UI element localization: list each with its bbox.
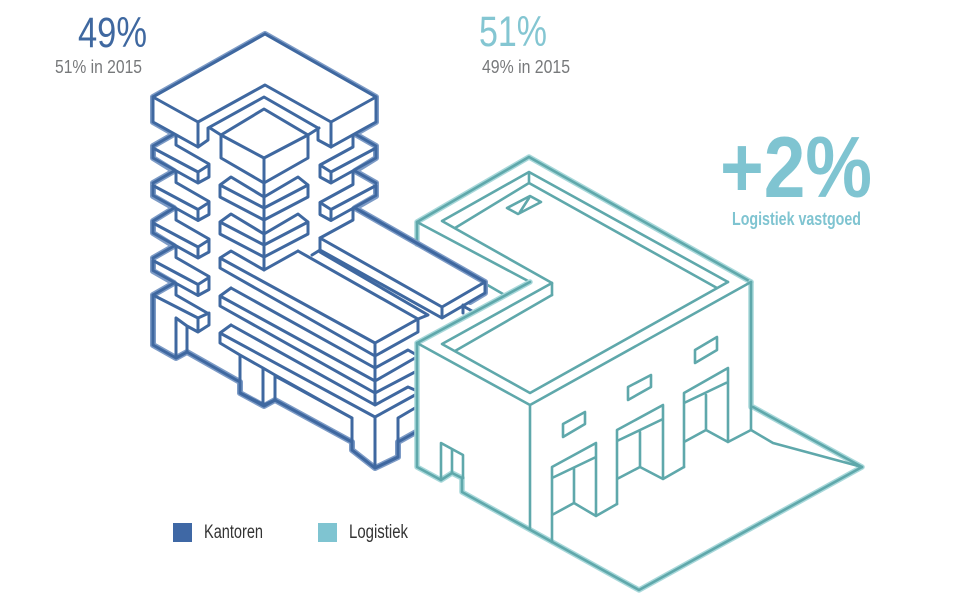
logistics building: front [415, 282, 862, 590]
icon: roof hatch [507, 196, 541, 214]
wall windows [563, 337, 717, 437]
logistics outline [417, 282, 862, 590]
office building [153, 34, 485, 468]
office lower floors [220, 250, 472, 468]
logistics roof [417, 282, 751, 528]
office top slab [153, 34, 376, 147]
stat: logistiek 51%: 49% in 2015 [482, 57, 570, 77]
office core cube [210, 109, 319, 220]
stat: logistiek 51%: 51% [479, 8, 547, 56]
office center floors [220, 177, 308, 270]
office long upper slab [320, 208, 485, 318]
stat: kantoren 49%: 51% in 2015 [55, 57, 142, 77]
stat: logistiek growth +2%: +2% [720, 120, 872, 216]
legend: logistiek: Logistiek [349, 522, 408, 543]
office right balconies [320, 135, 376, 238]
stat: logistiek 51% [479, 8, 570, 77]
office building outline [153, 34, 485, 468]
loading door 3 [684, 368, 751, 467]
stat: kantoren 49%: 49% [78, 9, 147, 57]
legend: kantoren [173, 522, 263, 543]
loading door 1 [552, 443, 617, 542]
stat: logistiek growth +2%: Logistiek vastgoed [732, 209, 861, 229]
logistics ground apron [751, 430, 862, 467]
office left balconies [153, 135, 209, 358]
legend [173, 522, 408, 543]
legend: kantoren: Kantoren [204, 522, 263, 543]
stat: kantoren 49% [55, 9, 147, 77]
side door [441, 443, 463, 480]
legend: logistiek [318, 522, 408, 543]
logistics building: rear roof lines [417, 157, 751, 295]
loading door 2 [617, 405, 684, 504]
